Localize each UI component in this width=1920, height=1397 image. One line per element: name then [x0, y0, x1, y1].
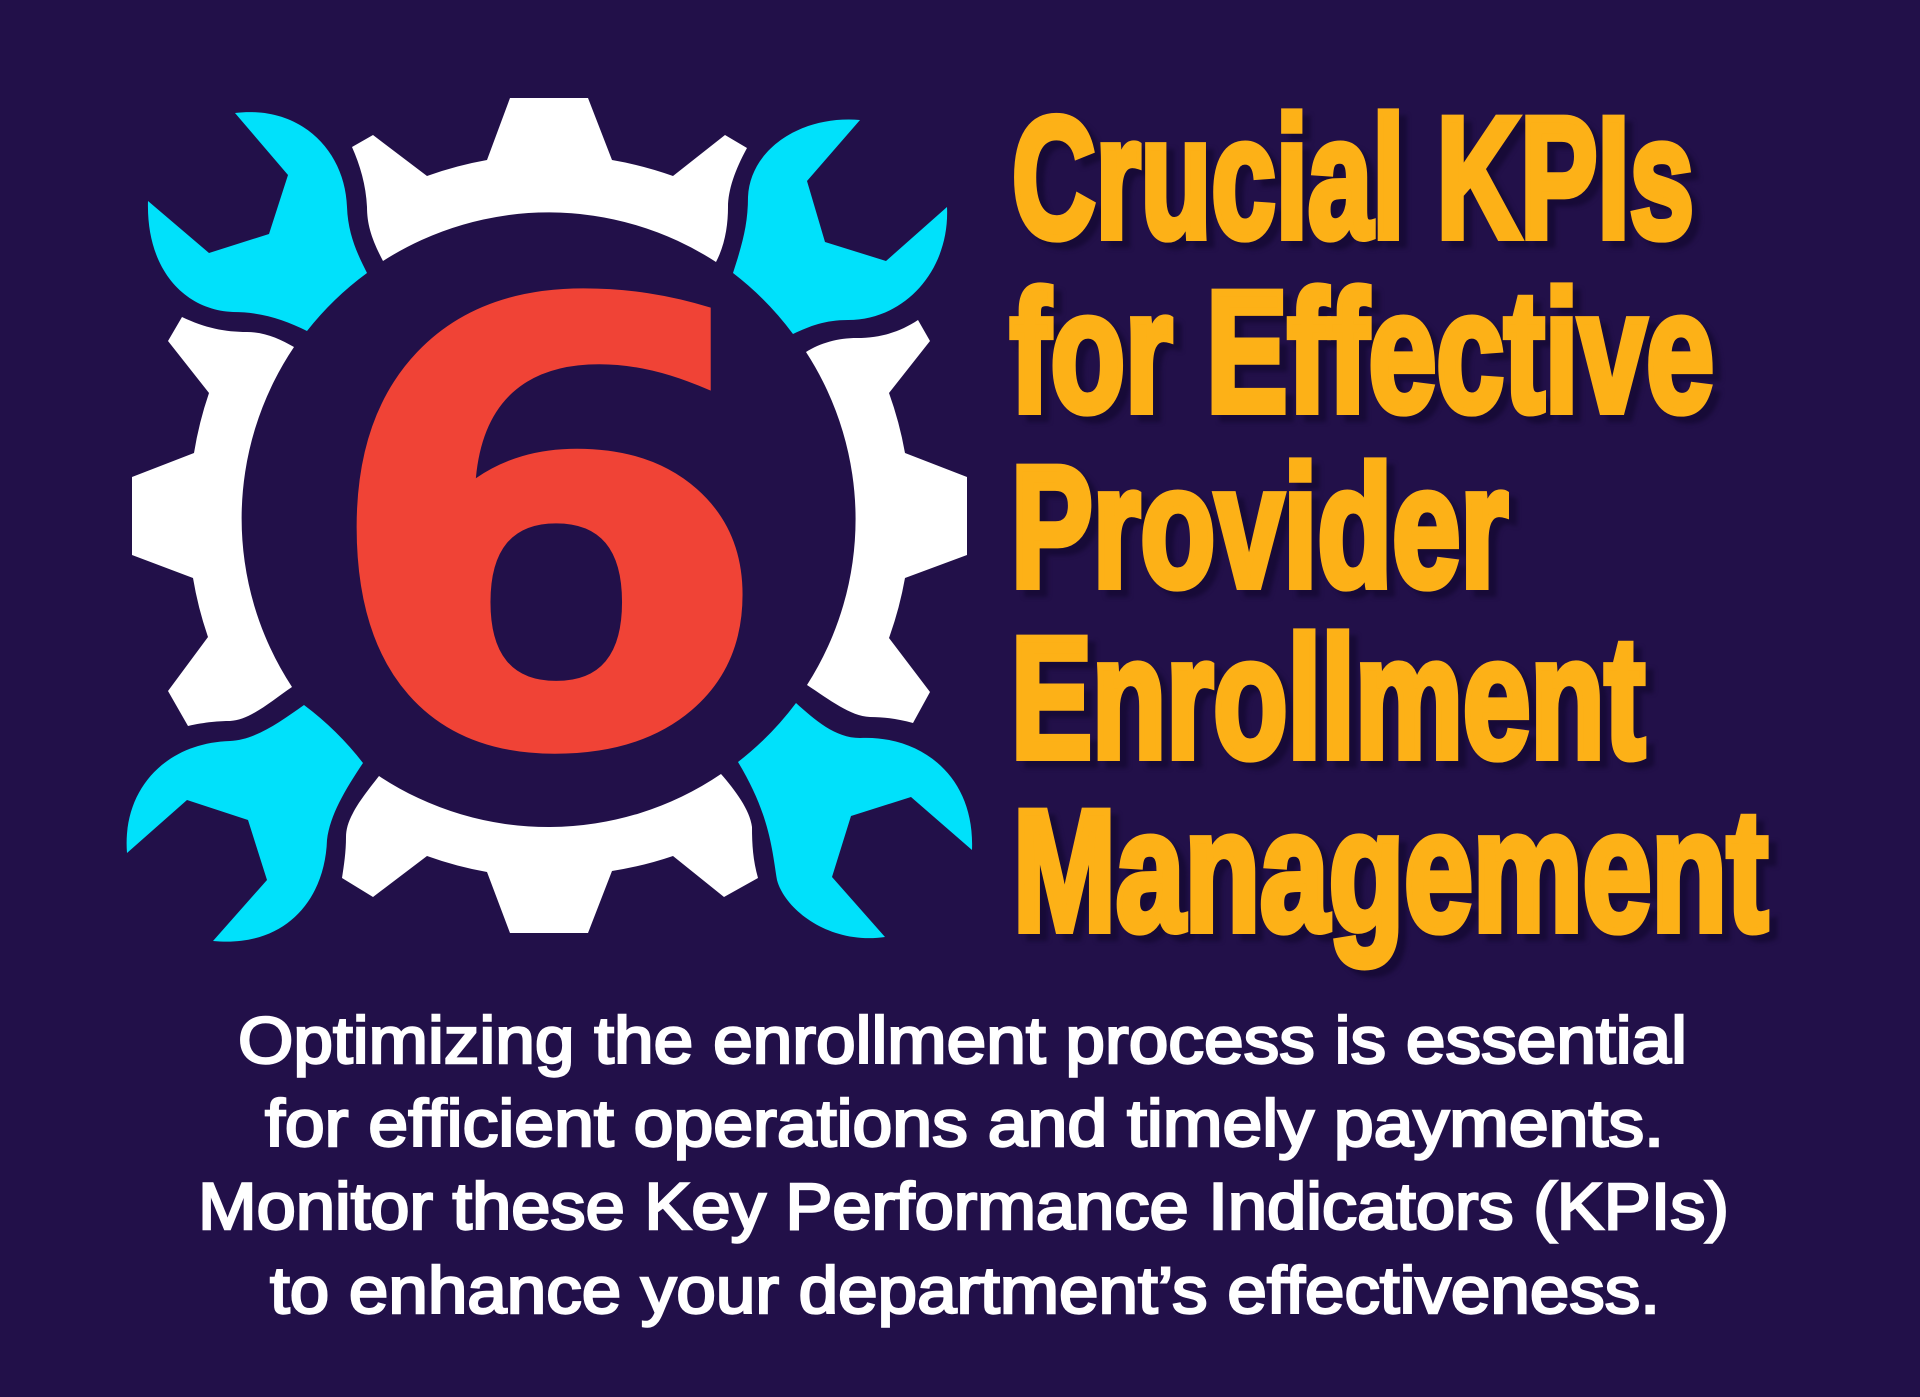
intro paragraph [198, 1003, 1729, 1327]
number six: 6 [315, 174, 778, 891]
intro line 1: Optimizing the enrollment process is essential [238, 1003, 1687, 1077]
icon: white gear [132, 98, 967, 933]
intro line 2: for efficient operations and timely payments. [265, 1086, 1664, 1160]
icon: gear with wrenches and number six [127, 98, 972, 942]
icon: four cyan wrenches [127, 112, 972, 942]
intro line 3: Monitor these Key Performance Indicators (KPIs) [198, 1169, 1729, 1243]
intro line 4: to enhance your department’s effectiveness. [270, 1253, 1660, 1327]
title line 3: Provider [1011, 431, 1508, 623]
title line 4: Enrollment [1011, 602, 1645, 794]
title [1010, 82, 1768, 967]
